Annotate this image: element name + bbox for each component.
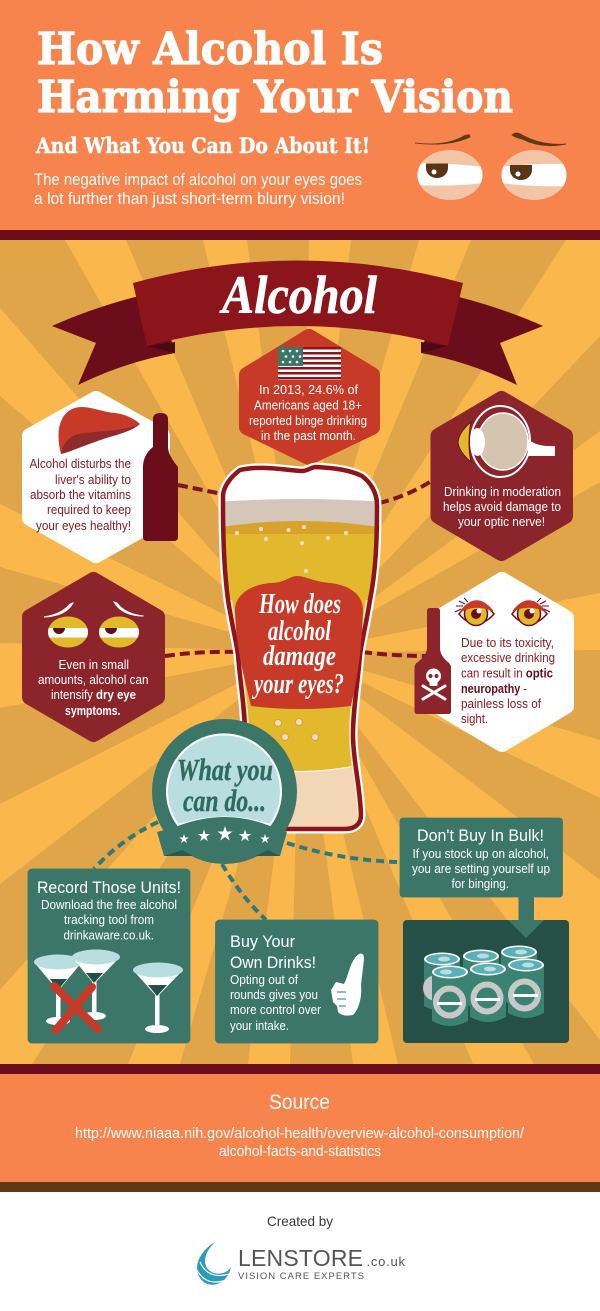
sunburst background bbox=[0, 240, 600, 1064]
footer credit bbox=[0, 1192, 600, 1311]
bulk pointer arrow bbox=[508, 890, 544, 938]
intro text: The negative impact of alcohol on your eyes goes bbox=[34, 171, 362, 189]
badge banner bbox=[157, 817, 287, 863]
ribbon banner: Alcohol bbox=[52, 260, 543, 385]
brown band bbox=[0, 1182, 600, 1192]
record text: drinkaware.co.uk. bbox=[64, 928, 154, 942]
record heading: Record Those Units! bbox=[37, 879, 181, 897]
optic nerve text bbox=[443, 485, 561, 529]
connectors: maroon dashed lines bbox=[165, 482, 430, 656]
panel: don't buy in bulk bbox=[400, 818, 569, 1043]
optic nerve text: your optic nerve! bbox=[458, 515, 545, 529]
icon: pointing hand bbox=[331, 954, 364, 1016]
title: Harming Your Vision bbox=[37, 72, 513, 123]
logo: domain: .co.uk bbox=[366, 1254, 406, 1269]
source url: http://www.niaaa.nih.gov/alcohol-health/overview-alcohol-consumption/ bbox=[75, 1125, 525, 1142]
intro text: a lot further than just short-term blurry vision! bbox=[34, 190, 345, 208]
neuropathy text: sight. bbox=[461, 712, 488, 726]
neuropathy text: neuropathy - bbox=[461, 682, 527, 696]
badge text: What you bbox=[177, 752, 273, 787]
icon: red cross bbox=[54, 986, 98, 1030]
header panel bbox=[0, 0, 600, 230]
badge: what you can do bbox=[152, 719, 297, 864]
neuropathy text bbox=[461, 636, 555, 726]
record text: tracking tool from bbox=[64, 913, 154, 927]
panel: optic neuropathy bbox=[414, 580, 566, 744]
logo: swirl bbox=[197, 1242, 231, 1285]
connectors: teal dashed lines bbox=[94, 822, 398, 920]
bulk heading: Don't Buy In Bulk! bbox=[417, 827, 544, 845]
liver text: liver's ability to bbox=[55, 473, 131, 487]
icon: US flag bbox=[278, 347, 341, 380]
drinks text: Opting out of bbox=[230, 973, 298, 987]
question text: alcohol bbox=[268, 615, 332, 647]
subtitle: And What You Can Do About It! bbox=[35, 133, 370, 158]
bulk illustration box bbox=[403, 920, 569, 1043]
drinks text: rounds gives you bbox=[230, 988, 318, 1002]
statistic text: In 2013, 24.6% of bbox=[259, 383, 359, 397]
liver text: required to keep bbox=[47, 503, 131, 517]
liver text bbox=[30, 457, 131, 533]
optic nerve text: helps avoid damage to bbox=[443, 500, 561, 514]
record text bbox=[41, 898, 177, 942]
bulk text: If you stock up on alcohol, bbox=[412, 847, 549, 861]
optic nerve text: Drinking in moderation bbox=[444, 485, 561, 499]
icon: dry eyes bbox=[44, 602, 144, 648]
title: How Alcohol Is bbox=[37, 24, 383, 75]
icon: tired eyes bbox=[415, 133, 569, 200]
icon: bloodshot eyes bbox=[455, 598, 550, 626]
top band bbox=[0, 230, 600, 240]
badge stars bbox=[179, 826, 270, 843]
panel: buy your own drinks bbox=[216, 920, 378, 1043]
statistic text bbox=[249, 383, 367, 443]
neuropathy text: excessive drinking bbox=[461, 651, 555, 665]
ribbon tail right bbox=[421, 297, 543, 385]
bulk text box bbox=[400, 818, 562, 897]
bulk text: you are setting yourself up bbox=[412, 862, 550, 876]
badge text: can do... bbox=[183, 783, 266, 818]
ribbon heading: Alcohol bbox=[219, 265, 377, 325]
panel: dry eye bbox=[30, 580, 157, 734]
panel: record those units bbox=[28, 869, 190, 1043]
statistic text: reported binge drinking bbox=[249, 414, 367, 428]
panel: liver bbox=[30, 399, 178, 555]
source url: alcohol-facts-and-statistics bbox=[219, 1143, 381, 1160]
drinks text: more control over bbox=[230, 1003, 321, 1017]
drinks heading: Own Drinks! bbox=[230, 954, 316, 972]
icon: eyeball diagram bbox=[458, 406, 555, 477]
glass outline bbox=[223, 467, 377, 829]
beer glass bbox=[215, 460, 385, 835]
source panel bbox=[0, 1074, 600, 1182]
panel: optic nerve bbox=[438, 399, 565, 553]
intro text bbox=[34, 171, 362, 208]
question shape bbox=[235, 576, 363, 709]
bulk text: for binging. bbox=[452, 877, 509, 891]
neuropathy text: Due to its toxicity, bbox=[461, 636, 554, 650]
icon: martini bbox=[133, 962, 183, 1033]
logo: wordmark: LENSTORE bbox=[238, 1245, 363, 1271]
dry eye text: Even in small bbox=[58, 658, 129, 672]
record text: Download the free alcohol bbox=[41, 898, 177, 912]
liver text: your eyes healthy! bbox=[36, 519, 131, 533]
dry eye text: symptoms. bbox=[65, 704, 120, 718]
question text: your eyes? bbox=[252, 668, 344, 700]
question text bbox=[252, 588, 344, 700]
statistic text: in the past month. bbox=[261, 429, 356, 443]
neuropathy text: can result in optic bbox=[461, 666, 553, 680]
icon: beer cans bbox=[423, 946, 544, 1026]
badge inner circle bbox=[167, 734, 281, 825]
ribbon centre bbox=[133, 260, 463, 346]
badge text bbox=[177, 752, 273, 818]
dry eye text: intensify dry eye bbox=[51, 688, 136, 702]
title bbox=[37, 24, 513, 123]
drinks heading bbox=[230, 933, 316, 972]
neuropathy text: painless loss of bbox=[461, 697, 541, 711]
foam bubbles bbox=[235, 525, 348, 740]
icon: liver bbox=[59, 407, 140, 454]
ribbon tail left bbox=[52, 297, 175, 385]
icon: crossed out martini bbox=[72, 950, 120, 1020]
created by: Created by bbox=[267, 1213, 333, 1229]
drinks text bbox=[230, 973, 321, 1033]
question text: damage bbox=[263, 640, 336, 672]
bottom band bbox=[0, 1064, 600, 1074]
icon: wine bottle bbox=[143, 413, 178, 541]
source url bbox=[75, 1125, 525, 1160]
dry eye text bbox=[38, 658, 149, 718]
source heading: Source bbox=[269, 1091, 330, 1114]
panel: binge drinking statistic bbox=[247, 337, 372, 457]
icon: poison bottle bbox=[414, 608, 451, 714]
drinks text: your intake. bbox=[230, 1019, 289, 1033]
icon: skull and crossbones bbox=[423, 668, 445, 699]
drinks heading: Buy Your bbox=[230, 933, 295, 951]
liver text: absorb the vitamins bbox=[30, 488, 131, 502]
statistic text: Americans aged 18+ bbox=[254, 398, 362, 412]
bulk text bbox=[412, 847, 550, 891]
logo: tagline: VISION CARE EXPERTS bbox=[238, 1271, 364, 1282]
liver text: Alcohol disturbs the bbox=[30, 457, 131, 471]
icon: crossed out martini bbox=[34, 954, 82, 1025]
dry eye text: amounts, alcohol can bbox=[38, 673, 149, 687]
question text: How does bbox=[258, 588, 341, 620]
